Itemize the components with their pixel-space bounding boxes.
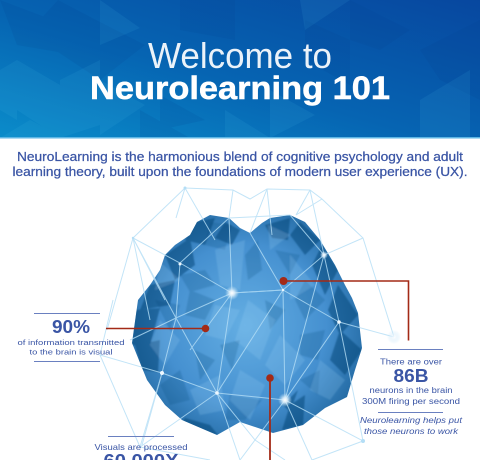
- intro text: [12, 149, 468, 179]
- title: Neurolearning 101: [90, 70, 390, 106]
- callout: 90% visual: to the brain is visual: [30, 348, 113, 356]
- connector: 60,000X: [266, 374, 274, 460]
- callout: 60,000X: Visuals are processed: [94, 443, 188, 452]
- callout: 86B neurons: neurons in the brain: [370, 386, 452, 395]
- callout: 86B neurons: Neurolearning helps put: [360, 416, 463, 425]
- callout: 86B neurons: 300M firing per second: [362, 397, 460, 406]
- header banner: [0, 0, 480, 138]
- callout: 90% visual: of information transmitted: [18, 338, 124, 347]
- callout: 86B neurons: those neurons to work: [364, 427, 459, 436]
- brain illustration: [132, 215, 362, 435]
- callout: 86B neurons: [360, 349, 463, 436]
- network nodes: [132, 186, 401, 443]
- connector: 90%: [106, 325, 209, 332]
- title: [90, 35, 390, 106]
- connector: 86B: [280, 277, 408, 340]
- callout: 60,000X: [94, 436, 188, 460]
- title: Welcome to: [148, 35, 332, 76]
- callout: 86B neurons: There are over: [380, 358, 442, 366]
- callout: 90% visual: 90%: [52, 317, 90, 337]
- callout: 86B neurons: 86B: [394, 366, 428, 386]
- intro text: NeuroLearning is the harmonious blend of cognitive psychology and adult: [17, 149, 463, 164]
- intro text: learning theory, built upon the foundations of modern user experience (UX).: [12, 164, 468, 179]
- callout: 90% visual: [18, 313, 124, 362]
- network lines: [100, 188, 394, 460]
